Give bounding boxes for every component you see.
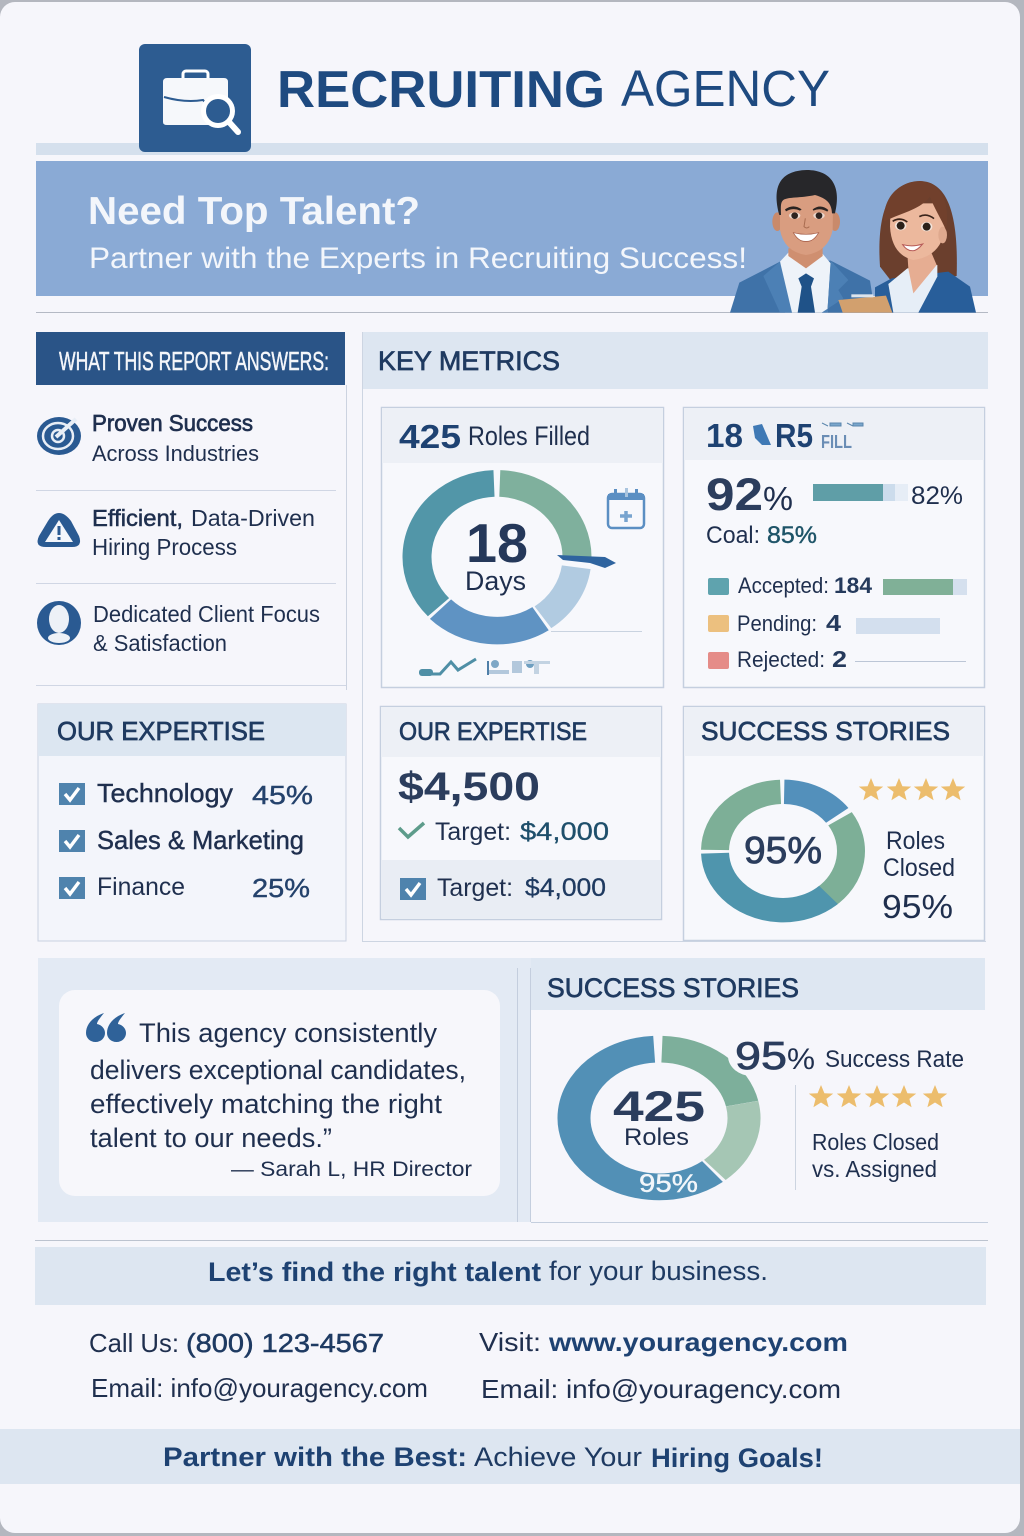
banner subheading: Partner with the Experts in Recruiting Success! (89, 242, 747, 275)
icon: target (37, 417, 81, 455)
icon: quote mark (86, 1013, 126, 1042)
success rate: % (787, 1043, 815, 1076)
call to action band: Let’s find the right talent (208, 1257, 541, 1287)
heading: OUR EXPERTISE (57, 716, 265, 746)
stars (859, 778, 965, 800)
banner heading: Need Top Talent? (88, 190, 420, 233)
item: proven success (92, 410, 259, 466)
footer band: Partner with the Best: (163, 1442, 467, 1472)
goal (706, 522, 817, 549)
panel: testimonial and success: Roles Closed (812, 1129, 939, 1155)
item: client focus (93, 601, 320, 656)
legend: rejected: 2 (832, 646, 847, 672)
title (277, 60, 830, 119)
bar: 82 percent (813, 482, 963, 510)
item: proven success: Proven Success (92, 410, 253, 436)
contact details (89, 1327, 848, 1404)
goal: 85% (767, 522, 817, 549)
footer band: Hiring Goals! (651, 1443, 823, 1473)
card: offer stats: FILL (821, 432, 852, 452)
donut chart: 425 roles (539, 1021, 779, 1215)
item: client focus: Dedicated Client Focus (93, 601, 320, 627)
card: expertise revenue: $4,500 (398, 765, 540, 809)
contact details: Call Us: (89, 1328, 179, 1358)
panel: testimonial and success (38, 958, 988, 1223)
contact details: www.youragency.com (548, 1327, 848, 1357)
heading: KEY METRICS (378, 346, 560, 376)
mini sparkline icons (419, 659, 550, 676)
success rate (735, 1035, 964, 1078)
icon: calendar (608, 488, 644, 528)
card: expertise revenue: Target: (437, 874, 513, 902)
card: roles filled: Roles Filled (468, 421, 590, 451)
footer band: Achieve Your (474, 1442, 642, 1472)
card: success stories: 95% (882, 888, 953, 925)
card: roles filled (382, 408, 664, 688)
card: success stories (684, 706, 984, 940)
donut chart: 425 roles: 95% (639, 1170, 698, 1198)
card: success stories: Closed (883, 854, 955, 882)
contact details: (800) 123-4567 (186, 1328, 384, 1358)
row: finance (59, 873, 310, 903)
card: offer stats: R5 (775, 417, 813, 454)
call to action band (35, 1240, 988, 1305)
legend: accepted: Accepted: (738, 573, 829, 598)
row: technology: Technology (97, 778, 233, 808)
item: efficient hiring: Efficient, (92, 505, 183, 531)
card: offer stats: 18 (706, 417, 743, 454)
legend: rejected (708, 646, 966, 672)
quote card (59, 990, 500, 1196)
contact details: Email: info@youragency.com (481, 1374, 841, 1404)
card: expertise revenue: $4,000 (520, 818, 609, 846)
row: finance: Finance (97, 873, 185, 901)
donut chart: 95 percent: 95% (744, 830, 822, 872)
legend: accepted (708, 573, 967, 598)
footer band (0, 1429, 1020, 1484)
title: RECRUITING (277, 61, 605, 119)
row: finance: 25% (252, 873, 310, 903)
notch behind rate (728, 1036, 776, 1076)
donut chart: 425 roles: Roles (624, 1124, 689, 1151)
banner lower rule (36, 312, 988, 313)
legend: pending: Pending: (737, 611, 817, 636)
card: expertise revenue (380, 706, 662, 920)
panel: testimonial and success: vs. Assigned (812, 1156, 937, 1182)
panel: what this report answers (36, 332, 347, 690)
card: expertise revenue: OUR EXPERTISE (399, 718, 587, 746)
call to action band: for your business. (549, 1256, 768, 1286)
donut chart: 18 days: 18 (466, 512, 528, 574)
stars (809, 1085, 947, 1107)
header: logo icon (139, 44, 251, 152)
icon: check (399, 823, 424, 837)
card: success stories: SUCCESS STORIES (701, 716, 950, 746)
card: roles filled: 425 (399, 418, 461, 455)
card: offer stats (684, 408, 984, 688)
metric: 92 percent (706, 469, 793, 520)
heading: success stories: SUCCESS STORIES (547, 973, 799, 1003)
contact details: Email: info@youragency.com (91, 1373, 428, 1403)
success rate: 95 (735, 1035, 787, 1078)
item: efficient hiring (92, 505, 315, 560)
header band (36, 143, 988, 155)
contact details: Visit: (479, 1327, 541, 1357)
hero banner (36, 161, 988, 296)
legend: accepted: 184 (834, 573, 873, 598)
title: AGENCY (621, 60, 830, 117)
donut chart: 425 roles: 425 (613, 1083, 705, 1131)
legend: rejected: Rejected: (737, 647, 825, 672)
donut chart: 18 days (384, 453, 610, 661)
metric: 92 percent: % (763, 480, 793, 517)
item: proven success: Across Industries (92, 441, 259, 466)
panel heading: WHAT THIS REPORT ANSWERS: (59, 346, 329, 376)
success rate: Success Rate (825, 1046, 964, 1073)
panel: our expertise (38, 704, 346, 941)
card: expertise revenue: Target: (435, 818, 511, 846)
legend: pending: 4 (826, 610, 841, 636)
quote card: talent to our needs.” (90, 1123, 332, 1153)
panel: key metrics (362, 332, 988, 942)
row: technology (59, 778, 313, 810)
quote card: — Sarah L, HR Director (231, 1158, 472, 1181)
item: client focus: & Satisfaction (93, 630, 227, 656)
legend: pending (708, 610, 940, 636)
card: success stories: Roles (886, 827, 945, 855)
row: sales and marketing: Sales & Marketing (97, 825, 304, 855)
quote card: delivers exceptional candidates, (90, 1055, 466, 1085)
metric: 92 percent: 92 (706, 469, 763, 520)
item: efficient hiring: Hiring Process (92, 534, 237, 560)
donut chart: 95 percent (687, 767, 879, 935)
item: efficient hiring: Data-Driven (191, 505, 315, 531)
illustration: two recruiters (730, 170, 976, 313)
bar: 82 percent: 82% (911, 482, 963, 510)
goal: Coal: (706, 522, 760, 549)
icon: checkbox (400, 878, 426, 900)
card: expertise revenue: $4,000 (525, 874, 606, 902)
icon: alert triangle (38, 513, 80, 547)
quote card: This agency consistently (139, 1018, 438, 1048)
donut chart: 18 days: Days (465, 566, 526, 596)
row: technology: 45% (252, 780, 313, 810)
quote card: effectively matching the right (90, 1089, 443, 1119)
icon: client person (37, 601, 81, 645)
pointer (557, 555, 616, 568)
